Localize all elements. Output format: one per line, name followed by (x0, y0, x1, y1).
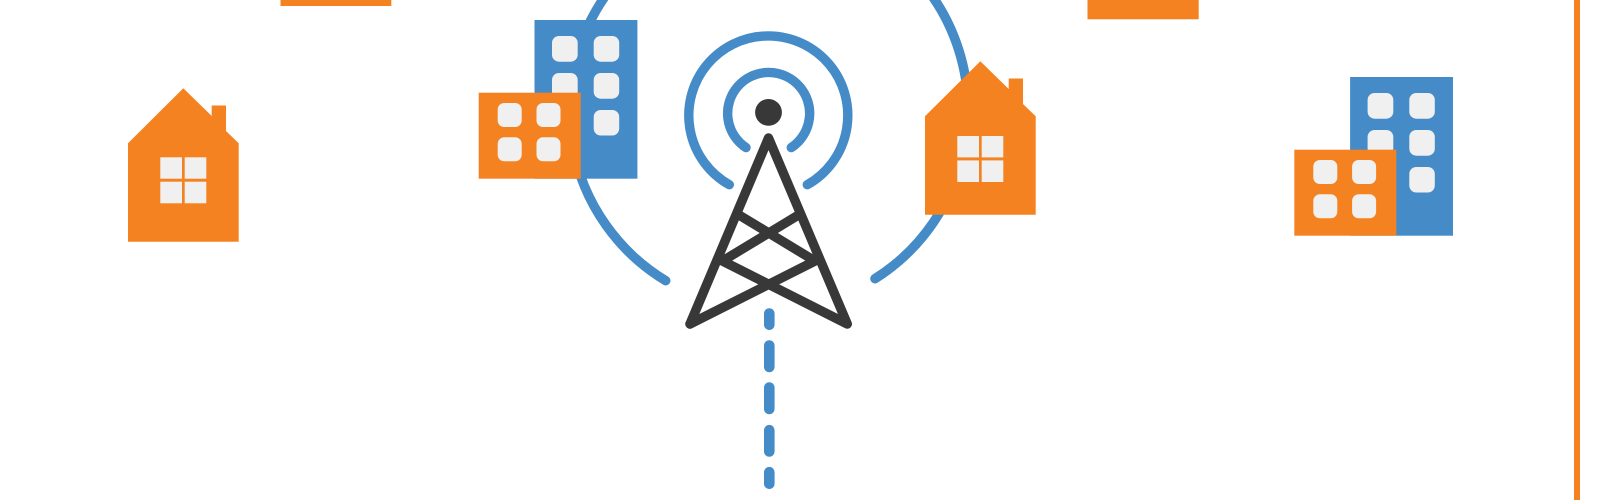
low orange building (479, 93, 581, 179)
house centre-right window (957, 136, 1003, 182)
top bar: left orange segment (280, 0, 391, 6)
house left window (160, 157, 206, 203)
tall blue building right (1350, 77, 1453, 236)
tower signal ring outer (689, 36, 848, 185)
tower signal ring inner (728, 72, 810, 148)
icon: house centre-right (925, 61, 1036, 215)
tower beacon dot (755, 99, 782, 126)
top bar: right orange segment (1088, 0, 1199, 19)
signal arc: large outer wave (569, 0, 968, 281)
right edge orange bar (1574, 0, 1580, 500)
icon: office buildings right (1294, 77, 1453, 236)
icon: house left (128, 88, 239, 242)
tower lattice (690, 138, 847, 324)
low orange building right (1294, 150, 1396, 236)
icon: office buildings centre-left (479, 20, 637, 179)
icon: radio tower (689, 36, 848, 324)
dashed signal line (764, 314, 775, 484)
tall blue building (534, 20, 637, 179)
